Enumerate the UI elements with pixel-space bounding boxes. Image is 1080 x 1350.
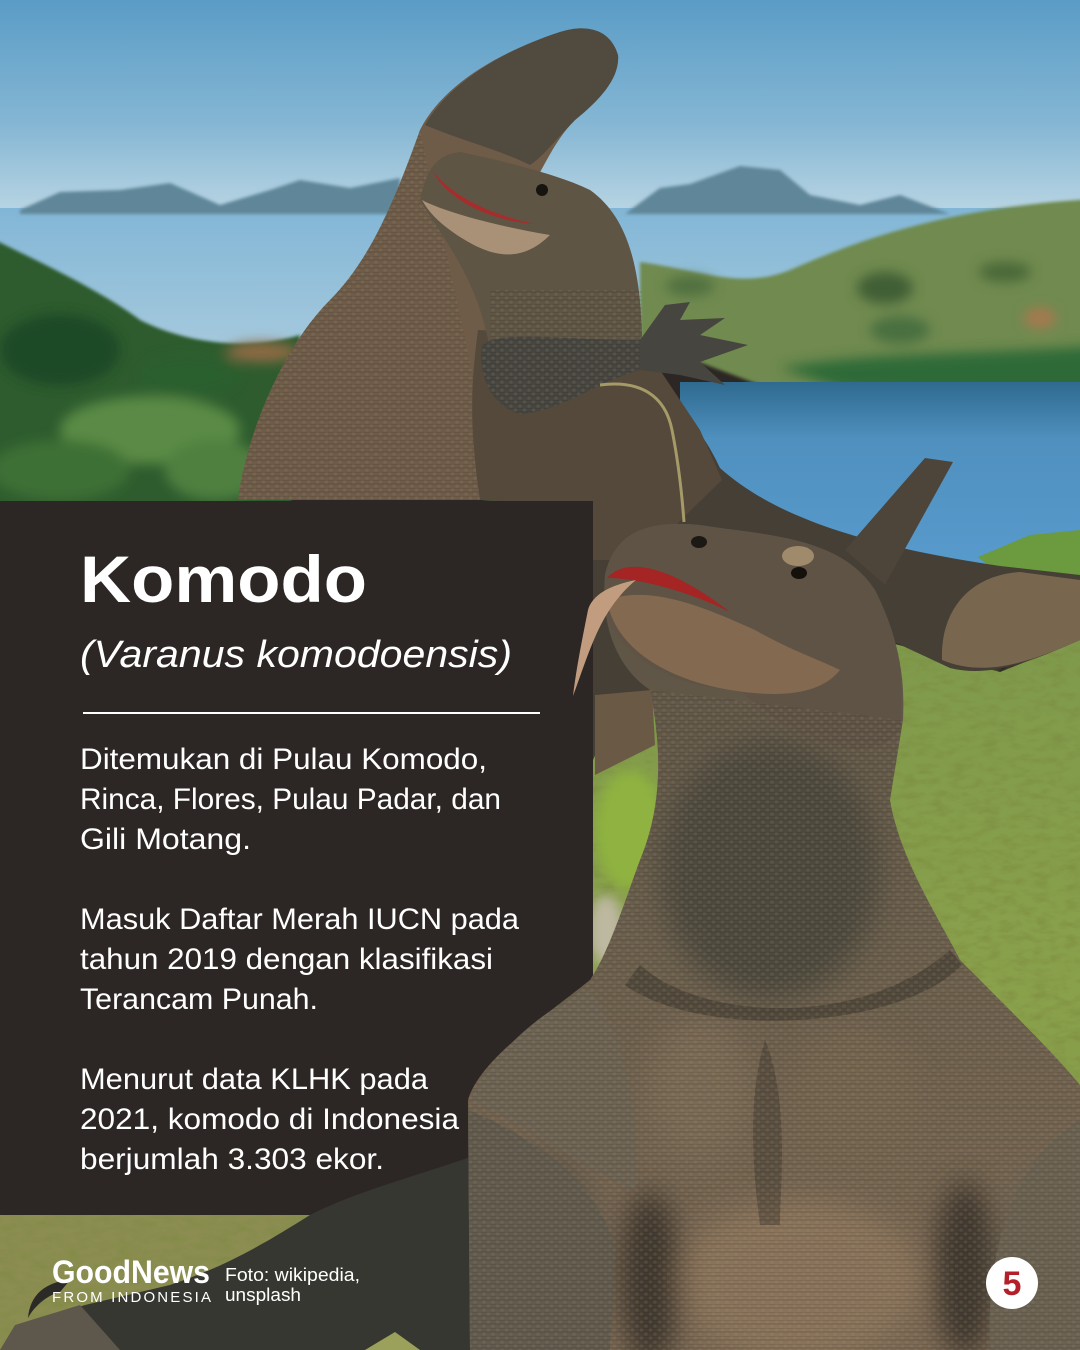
- komodo: second lizard head and neck: [420, 152, 642, 352]
- nostril: [691, 536, 707, 548]
- title: Komodo: [80, 542, 367, 616]
- left meadow bright grass: [595, 770, 665, 890]
- photo credit: [225, 1265, 360, 1305]
- chest crease: [753, 1040, 782, 1225]
- komodo: standing lizard: [238, 28, 618, 500]
- komodo: front lizard: [468, 524, 1080, 1350]
- background: right green hill: [640, 198, 1080, 400]
- hill dark foliage: [666, 262, 1080, 400]
- head: [605, 524, 902, 749]
- scientific name: (Varanus komodoensis): [80, 634, 512, 676]
- background: distant islands: [20, 166, 950, 214]
- grass stem: [600, 384, 684, 522]
- logo: GoodNews from Indonesia: GoodNews: [52, 1254, 210, 1290]
- body shading: [541, 736, 1009, 1350]
- background: right meadow: [593, 640, 1080, 1350]
- text block: population: [80, 1063, 459, 1176]
- body and neck: [468, 524, 1080, 1350]
- text block: population: berjumlah 3.303 ekor.: [80, 1143, 384, 1176]
- page number badge: 5: [1003, 1265, 1021, 1303]
- text block: population: 2021, komodo di Indonesia: [80, 1103, 459, 1136]
- komodo: raised tail: [845, 458, 953, 585]
- divider line: [83, 712, 540, 714]
- eye: [782, 546, 814, 579]
- komodo: second lizard torso: [472, 330, 722, 560]
- text block: location: [80, 743, 501, 856]
- komodo: front lizard dark back arm: [0, 1157, 470, 1350]
- text block: conservation status: tahun 2019 dengan klasifikasi: [80, 943, 493, 976]
- text block: conservation status: Terancam Punah.: [80, 983, 318, 1016]
- tongue: [573, 580, 636, 696]
- logo: GoodNews from Indonesia: FROM INDONESIA: [52, 1289, 211, 1306]
- left forest highlights: [0, 314, 298, 500]
- text block: population: Menurut data KLHK pada: [80, 1063, 428, 1096]
- gap between lizards: [477, 467, 517, 503]
- text block: conservation status: [80, 903, 519, 1016]
- text block: location: Ditemukan di Pulau Komodo,: [80, 743, 487, 776]
- komodo: fighting body at back: [500, 380, 1080, 775]
- text block: location: Rinca, Flores, Pulau Padar, dan: [80, 783, 501, 816]
- pale rock: [588, 895, 624, 965]
- background: left forest hill: [0, 228, 300, 520]
- background: distant sea: [0, 208, 1080, 348]
- left shoulder: [470, 990, 637, 1190]
- photo credit: Foto: wikipedia,: [225, 1265, 360, 1285]
- komodo: second lizard clawed arm: [481, 302, 748, 414]
- mouth: [607, 567, 730, 612]
- bottom-left grass: [0, 1215, 470, 1350]
- photo credit: unsplash: [225, 1285, 301, 1305]
- text panel background: [0, 501, 593, 1215]
- body scale texture: [468, 690, 1080, 1350]
- left arm: [468, 1110, 615, 1350]
- background: lake: [680, 382, 1080, 612]
- logo: GoodNews from Indonesia: [52, 1254, 211, 1306]
- background: sky: [0, 0, 1080, 230]
- page number badge: [986, 1257, 1038, 1309]
- lower jaw: [607, 595, 840, 694]
- throat collar: [625, 950, 962, 1021]
- text block: location: Gili Motang.: [80, 823, 251, 856]
- text block: conservation status: Masuk Daftar Merah IUCN pada: [80, 903, 519, 936]
- distant grass patch: [978, 530, 1080, 575]
- right arm: [989, 1120, 1080, 1350]
- meadow texture: [593, 640, 1080, 1350]
